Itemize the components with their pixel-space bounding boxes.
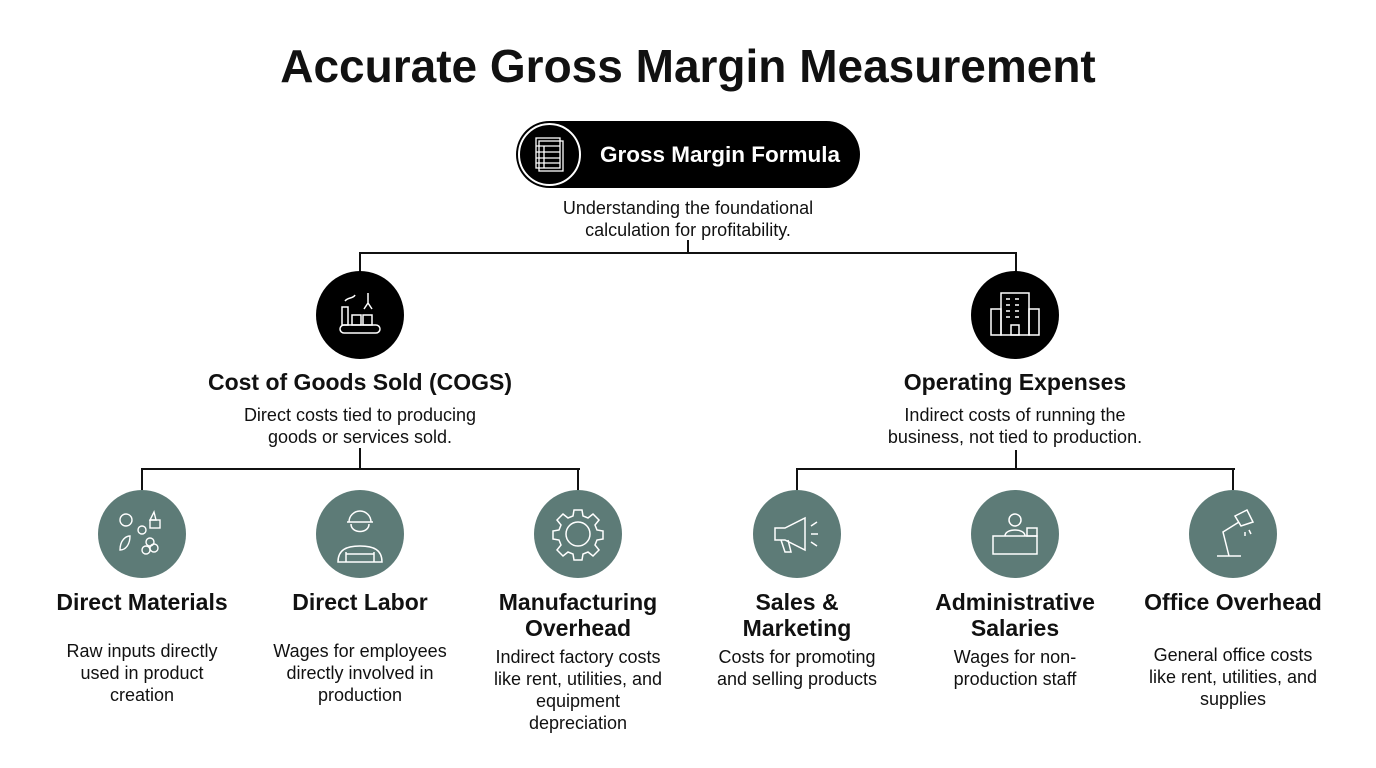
text: formula subtitle: Understanding the foundational [563, 198, 813, 218]
text: opex desc: business, not tied to production. [888, 427, 1142, 447]
text: Costs for promoting [718, 647, 876, 667]
text: Indirect factory costs [495, 647, 661, 667]
text: COGS desc [244, 405, 476, 447]
text: Wages for non- [954, 647, 1076, 667]
heading: administrative salaries: Administrative [935, 589, 1095, 615]
text: directly involved in [286, 663, 434, 683]
text: supplies [1200, 689, 1266, 709]
pill: gross margin formula: Gross Margin Formula [600, 142, 840, 167]
heading: administrative salaries [935, 589, 1095, 641]
icon: ledger [518, 123, 581, 186]
icon: factory [316, 271, 404, 359]
text: COGS desc: Direct costs tied to producing [244, 405, 476, 425]
text [717, 647, 877, 689]
pill: gross margin formula [516, 121, 860, 188]
text: equipment [536, 691, 620, 711]
text [66, 641, 218, 705]
text: depreciation [529, 713, 627, 733]
heading: office overhead: Office Overhead [1144, 589, 1322, 615]
icon: materials [98, 490, 186, 578]
text: creation [110, 685, 174, 705]
icon: megaphone [753, 490, 841, 578]
heading: sales & marketing [743, 589, 851, 641]
text: production [318, 685, 402, 705]
icon: building [971, 271, 1059, 359]
heading: COGS: Cost of Goods Sold (COGS) [208, 369, 512, 395]
text: formula subtitle [563, 198, 813, 240]
heading: direct labor: Direct Labor [292, 589, 428, 615]
text: opex desc: Indirect costs of running the [904, 405, 1126, 425]
heading: manufacturing overhead: Overhead [525, 615, 631, 641]
title: Accurate Gross Margin Measurement [280, 40, 1096, 92]
heading: operating expenses: Operating Expenses [904, 369, 1126, 395]
text: Wages for employees [273, 641, 447, 661]
text: like rent, utilities, and [494, 669, 662, 689]
text: used in product [80, 663, 204, 683]
heading: direct materials: Direct Materials [56, 589, 228, 615]
text: opex desc [888, 405, 1142, 447]
heading: manufacturing overhead: Manufacturing [499, 589, 657, 615]
icon: worker [316, 490, 404, 578]
heading: sales & marketing: Sales & [755, 589, 839, 615]
text: COGS desc: goods or services sold. [268, 427, 452, 447]
text: production staff [954, 669, 1076, 689]
text [494, 647, 662, 733]
heading: administrative salaries: Salaries [971, 615, 1059, 641]
icon: admin desk [971, 490, 1059, 578]
text: like rent, utilities, and [1149, 667, 1317, 687]
icon: gear [534, 490, 622, 578]
text: and selling products [717, 669, 877, 689]
heading: sales & marketing: Marketing [743, 615, 851, 641]
text [1149, 645, 1317, 709]
text: formula subtitle: calculation for profitability. [585, 220, 791, 240]
text [954, 647, 1076, 689]
icon: lamp [1189, 490, 1277, 578]
heading: manufacturing overhead [499, 589, 657, 641]
text: General office costs [1154, 645, 1312, 665]
text: Raw inputs directly [66, 641, 218, 661]
text [273, 641, 447, 705]
